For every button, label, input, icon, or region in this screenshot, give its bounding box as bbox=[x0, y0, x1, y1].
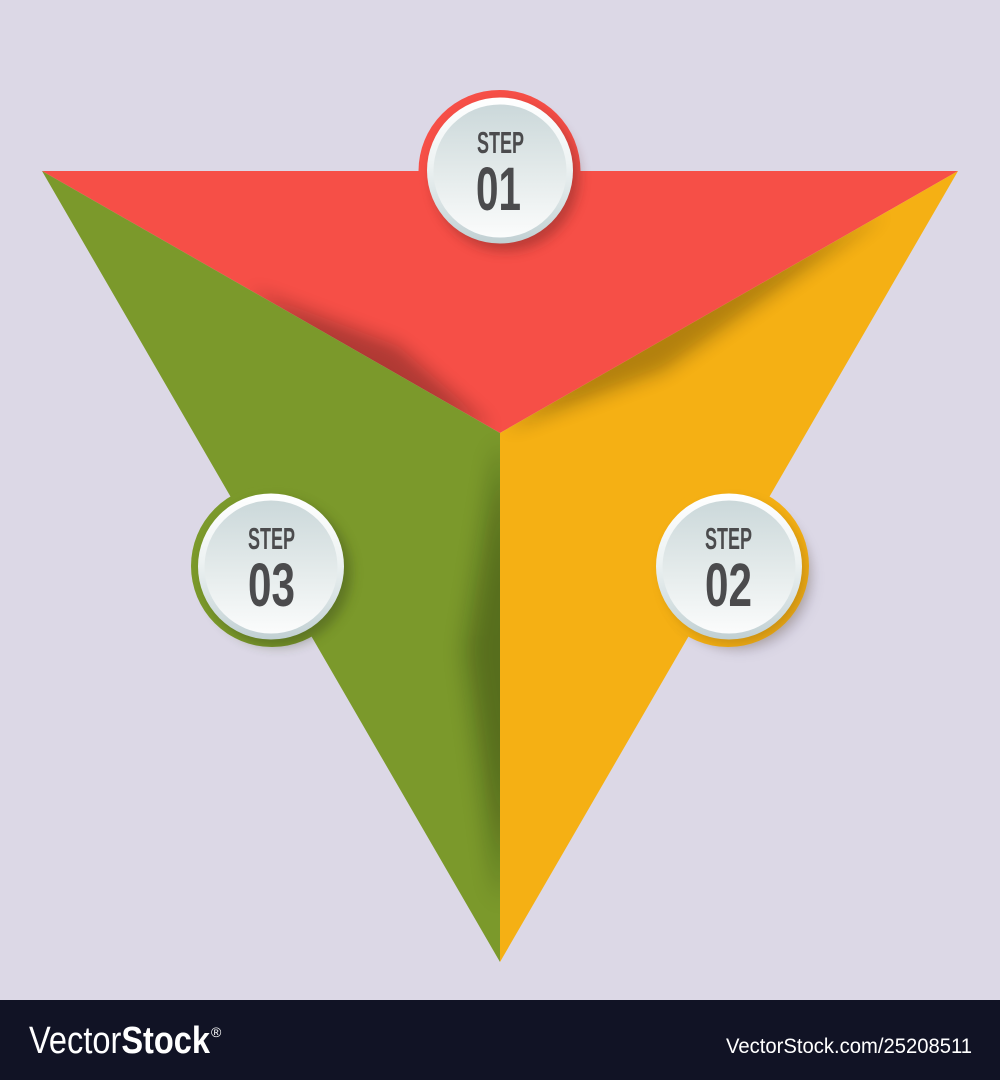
number: 01: 01 bbox=[476, 155, 521, 223]
panel: green segment bbox=[42, 171, 535, 962]
footer bar bbox=[0, 1000, 1000, 1080]
number: 03: 03 bbox=[248, 551, 295, 619]
logo: VectorStock: VectorStock bbox=[29, 1020, 211, 1062]
panel: yellow segment bbox=[500, 171, 958, 962]
footer id text: VectorStock.com/25208511 bbox=[726, 1035, 972, 1058]
label: step 03: STEP bbox=[248, 521, 295, 556]
label: step 01: STEP bbox=[477, 125, 524, 160]
logo registered mark: ® bbox=[211, 1024, 222, 1040]
badge: step 03 bbox=[191, 485, 353, 647]
badge: step 02 bbox=[647, 485, 813, 651]
label: step 02: STEP bbox=[705, 521, 752, 556]
badge: step 01 bbox=[418, 90, 580, 252]
number: 02: 02 bbox=[705, 551, 752, 619]
panel: red segment bbox=[42, 171, 958, 433]
triangle diagram bbox=[42, 171, 958, 962]
